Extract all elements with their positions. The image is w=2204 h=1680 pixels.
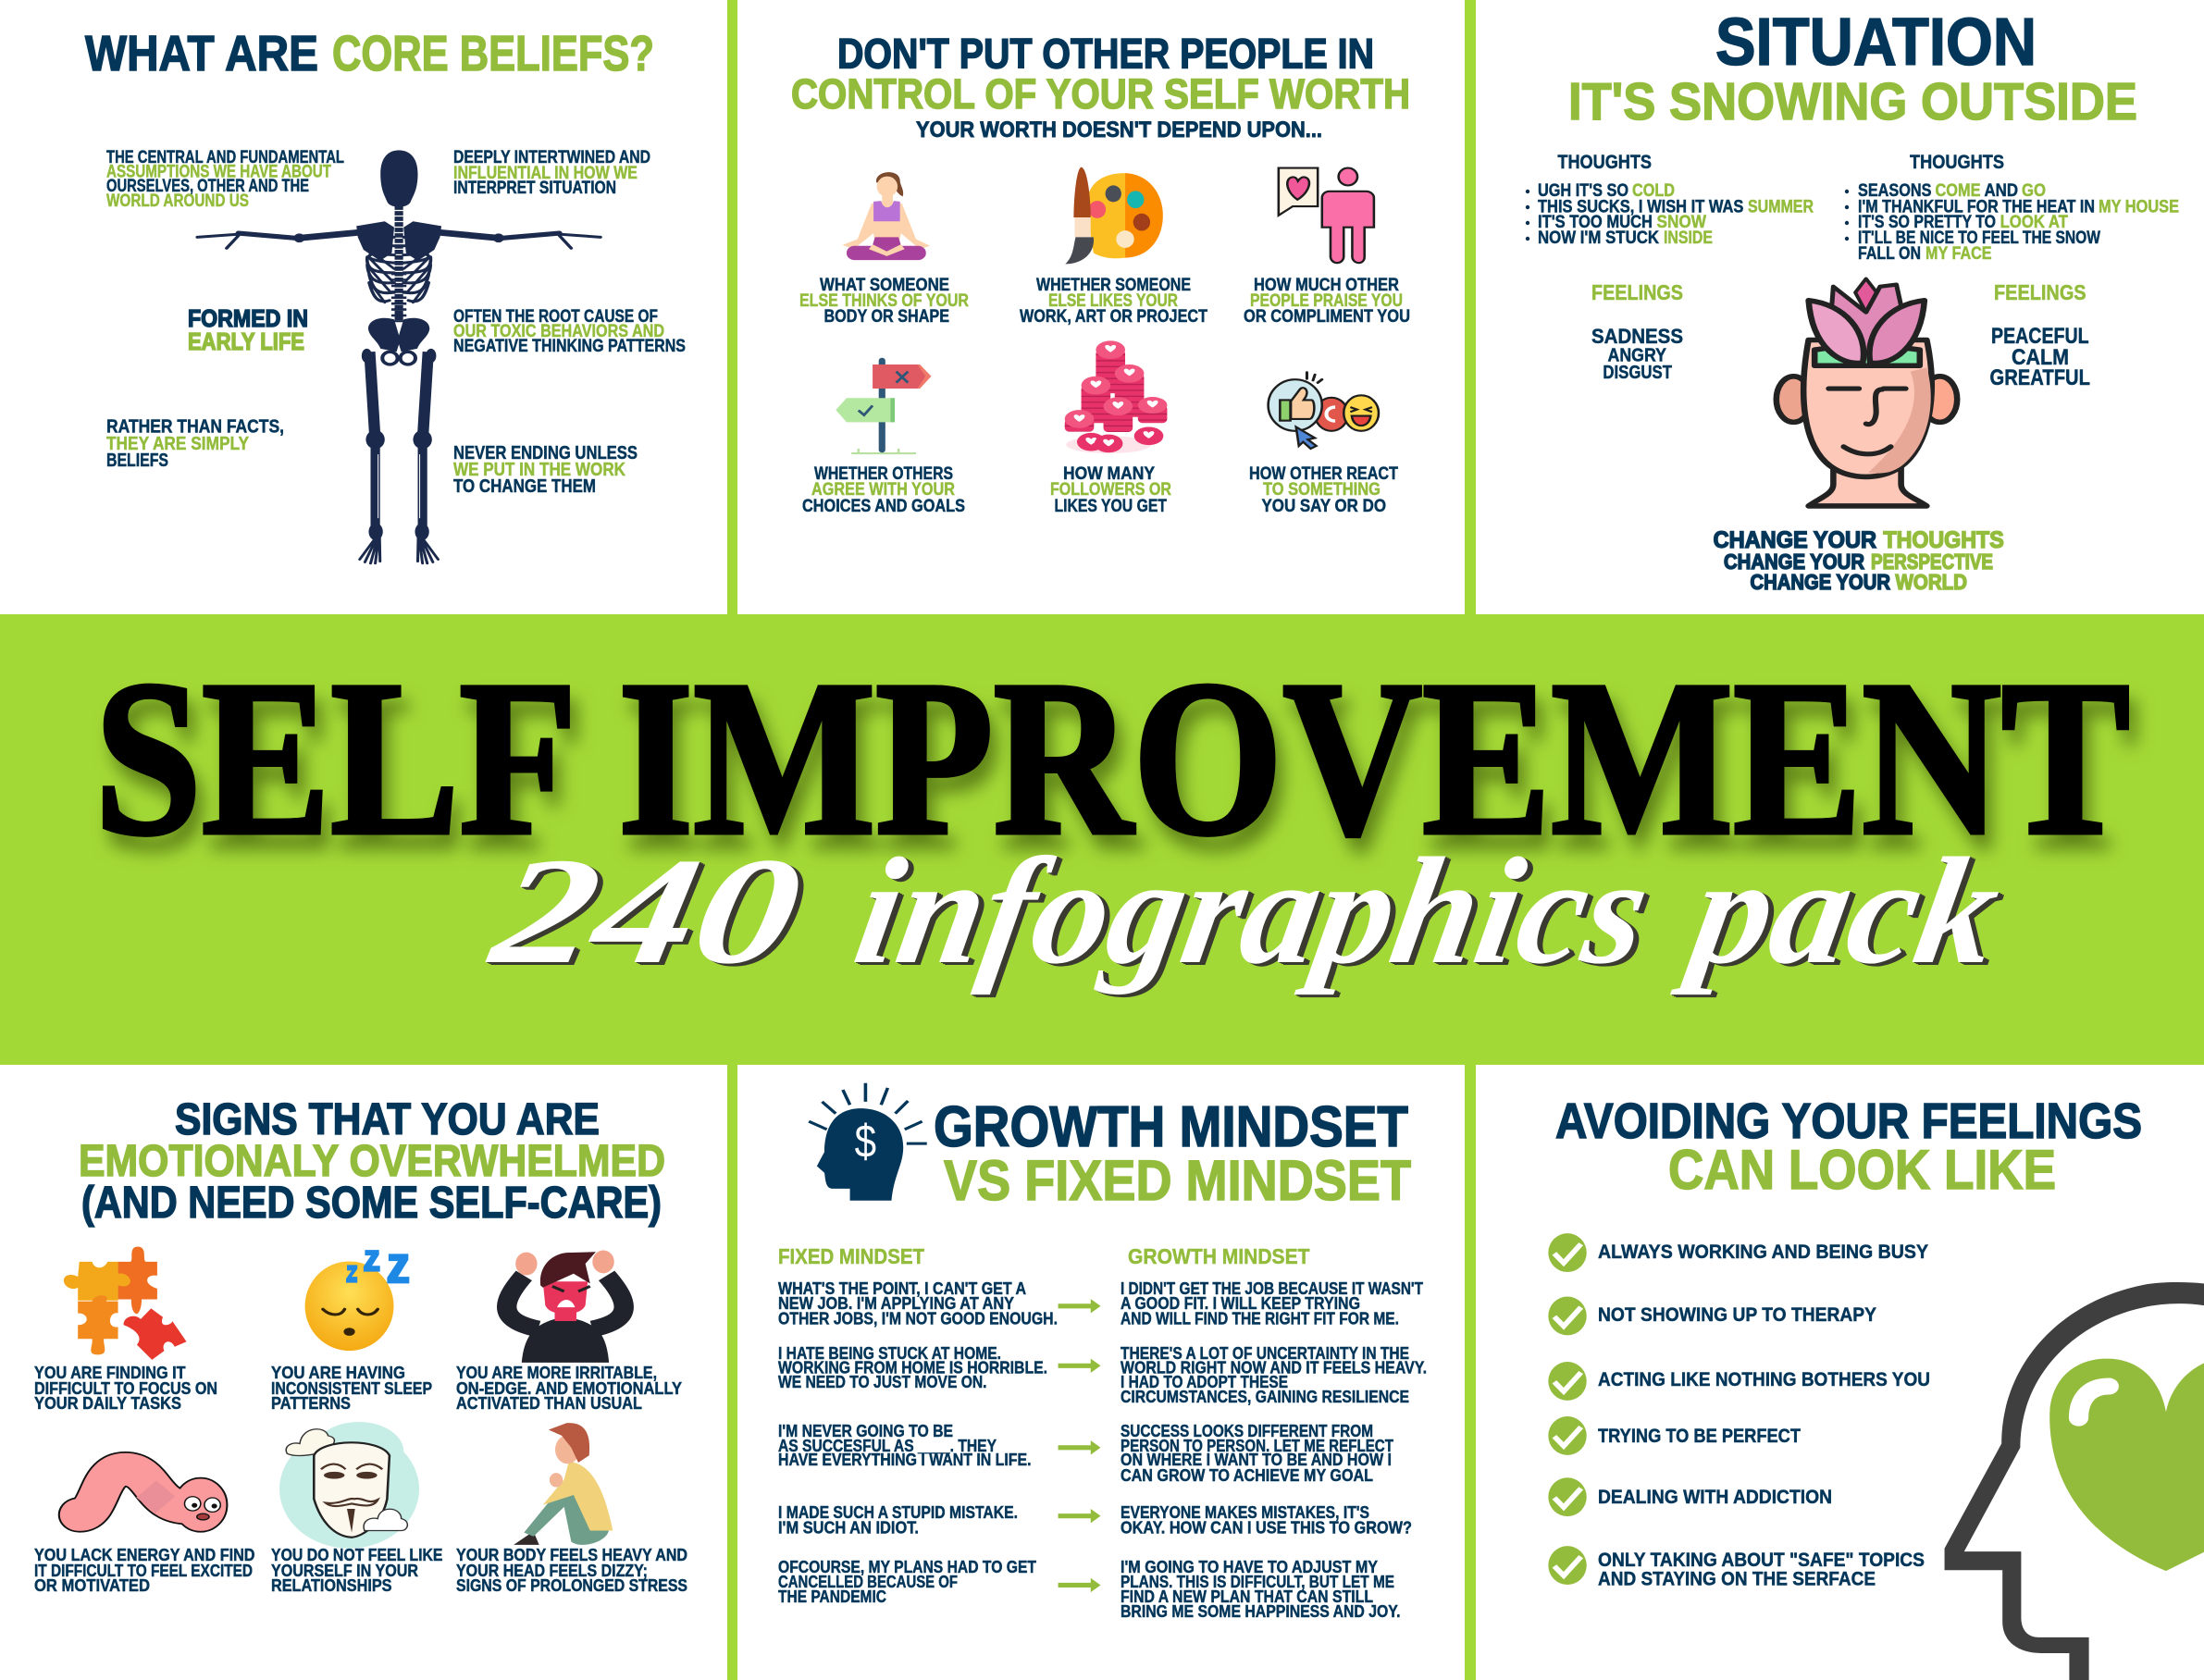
title band: [0, 614, 2204, 1065]
heading: GROWTH MINDSET: [934, 1095, 1408, 1159]
caption: irritable: ON-EDGE. AND EMOTIONALLY: [456, 1378, 683, 1398]
caption: praise: PEOPLE PRAISE YOU: [1250, 291, 1403, 311]
caption: praise: [1244, 276, 1410, 327]
thoughts: negative list: UGH IT'S SO: [1538, 181, 1628, 201]
row 4 growth: [1121, 1502, 1412, 1538]
row 3 growth: PERSON TO PERSON. LET ME REFLECT: [1121, 1436, 1394, 1455]
icon: puzzle pieces: [64, 1247, 187, 1360]
heading: (AND NEED SOME SELF-CARE): [81, 1179, 662, 1228]
row 5 fixed: CANCELLED BECAUSE OF: [778, 1572, 958, 1591]
heading: [934, 1095, 1411, 1212]
thoughts: negative list: INSIDE: [1664, 229, 1713, 248]
caption: choices: [802, 464, 965, 516]
caption: body or shape: [799, 276, 969, 327]
heading: [1555, 1093, 2142, 1201]
row 1 fixed: WHAT'S THE POINT, I CAN'T GET A: [778, 1279, 1026, 1298]
panel: self worth: [791, 30, 1410, 516]
panel: avoiding your feelings: [1548, 1093, 2204, 1680]
text: rather than facts: [106, 416, 284, 471]
row 4 growth: OKAY. HOW CAN I USE THIS TO GROW?: [1121, 1517, 1412, 1538]
caption: energy: IT DIFFICULT TO FEEL EXCITED: [34, 1561, 253, 1580]
caption: relationships: YOU DO NOT FEEL LIKE: [271, 1545, 442, 1564]
row 1 fixed: NEW JOB. I'M APPLYING AT ANY: [778, 1293, 1015, 1313]
thoughts: positive list: GO: [2022, 181, 2046, 201]
caption: body or shape: ELSE THINKS OF YOUR: [799, 291, 969, 311]
caption: react: [1249, 464, 1398, 516]
checklist text: ACTING LIKE NOTHING BOTHERS YOU: [1598, 1368, 1930, 1390]
text: never ending: NEVER ENDING UNLESS: [453, 443, 638, 463]
text: never ending: [453, 443, 638, 497]
thoughts: positive list: FALL ON: [1858, 244, 1921, 264]
feelings: left: SADNESS: [1591, 325, 1683, 348]
caption: relationships: RELATIONSHIPS: [271, 1575, 392, 1595]
closing statement: CHANGE YOUR: [1714, 527, 1876, 553]
row 1 growth: A GOOD FIT. I WILL KEEP TRYING: [1121, 1293, 1360, 1313]
row 5 growth: PLANS. THIS IS DIFFICULT, BUT LET ME: [1121, 1572, 1394, 1591]
feelings: right: FEELINGS: [1994, 280, 2086, 304]
caption: body or shape: WHAT SOMEONE: [820, 276, 949, 295]
icon: head with dollar sign: [809, 1083, 927, 1201]
thoughts: negative list: THOUGHTS: [1557, 152, 1652, 173]
text: deeply intertwined: INFLUENTIAL IN HOW WE: [453, 164, 638, 183]
row 3 growth: [1121, 1421, 1394, 1485]
caption: choices: CHOICES AND GOALS: [802, 497, 965, 516]
row 5 growth: [1121, 1557, 1401, 1621]
caption: work art project: WORK, ART OR PROJECT: [1020, 307, 1207, 327]
row 3 growth: CAN GROW TO ACHIEVE MY GOAL: [1121, 1465, 1373, 1485]
closing statement: [1714, 527, 2004, 594]
closing statement: THOUGHTS: [1883, 527, 2004, 553]
thoughts: positive list: IT'LL BE NICE TO FEEL THE SNOW: [1858, 229, 2100, 248]
heading: CAN LOOK LIKE: [1668, 1139, 2056, 1201]
thoughts: positive list: AND: [1984, 181, 2018, 201]
feelings: left: [1591, 280, 1683, 383]
heading: IT'S SNOWING OUTSIDE: [1568, 72, 2137, 131]
text: never ending: TO CHANGE THEM: [453, 476, 596, 497]
check icons: [1548, 1233, 1587, 1585]
row 2 fixed: I HATE BEING STUCK AT HOME.: [778, 1343, 1001, 1363]
caption: choices: AGREE WITH YOUR: [811, 480, 955, 500]
row 4 fixed: I MADE SUCH A STUPID MISTAKE.: [778, 1502, 1018, 1522]
thoughts: negative list: NOW I'M STUCK: [1538, 229, 1659, 248]
row 3 fixed: I'M NEVER GOING TO BE: [778, 1421, 953, 1440]
row 3 fixed: [778, 1421, 1031, 1469]
heading: SIGNS THAT YOU ARE: [175, 1095, 600, 1144]
row 2 growth: WORLD RIGHT NOW AND IT FEELS HEAVY.: [1121, 1358, 1427, 1377]
caption: react: YOU SAY OR DO: [1262, 497, 1386, 516]
row 1 growth: AND WILL FIND THE RIGHT FIT FOR ME.: [1121, 1308, 1399, 1328]
caption: sleep: INCONSISTENT SLEEP: [271, 1378, 432, 1398]
panel: situation: [1526, 6, 2179, 594]
text: root cause: NEGATIVE THINKING PATTERNS: [453, 337, 686, 356]
caption: react: HOW OTHER REACT: [1249, 464, 1398, 484]
row 1 fixed: [778, 1279, 1058, 1328]
checklist text: TRYING TO BE PERFECT: [1598, 1425, 1801, 1447]
icon: signpost: [836, 358, 931, 453]
heading: CONTROL OF YOUR SELF WORTH: [791, 70, 1410, 117]
caption: focus: YOUR DAILY TASKS: [34, 1393, 181, 1413]
column headings: GROWTH MINDSET: [1128, 1244, 1310, 1268]
heading: [1568, 6, 2137, 131]
heading: WHAT ARE: [85, 26, 318, 81]
checklist text: NOT SHOWING UP TO THERAPY: [1598, 1303, 1876, 1326]
row 2 growth: I HAD TO ADOPT THESE: [1121, 1372, 1288, 1391]
caption: work art project: [1020, 276, 1207, 327]
panel dividers: [727, 0, 1476, 1680]
row 2 growth: CIRCUMSTANCES, GAINING RESILIENCE: [1121, 1387, 1409, 1406]
row 2 growth: [1121, 1343, 1427, 1406]
text: never ending: WE PUT IN THE WORK: [453, 460, 625, 480]
thoughts: positive list: MY HOUSE: [2099, 198, 2179, 216]
text: root cause: [453, 307, 686, 356]
column headings: [778, 1244, 1310, 1268]
caption: irritable: [456, 1363, 683, 1413]
closing statement: CHANGE YOUR: [1751, 570, 1890, 594]
column headings: FIXED MINDSET: [778, 1244, 924, 1268]
subheading: YOUR WORTH DOESN'T DEPEND UPON...: [916, 117, 1322, 142]
panel: emotionally overwhelmed: [34, 1095, 687, 1595]
caption: work art project: ELSE LIKES YOUR: [1048, 291, 1178, 311]
feelings: left: ANGRY: [1608, 346, 1667, 366]
icon: sitting man: [514, 1423, 613, 1545]
thoughts: negative list: COLD: [1632, 181, 1675, 201]
thoughts: negative list: SNOW: [1656, 213, 1706, 232]
caption: energy: YOU LACK ENERGY AND FIND: [34, 1545, 255, 1564]
subtitle: pack: [1670, 826, 2012, 995]
icon: stacks of like coins: [1065, 340, 1167, 453]
row 1 growth: I DIDN'T GET THE JOB BECAUSE IT WASN'T: [1121, 1279, 1424, 1298]
caption: choices: WHETHER OTHERS: [814, 464, 953, 484]
text: formed in early life: FORMED IN: [188, 304, 308, 332]
heading: EMOTIONALY OVERWHELMED: [79, 1137, 665, 1186]
icon: skeleton: [197, 150, 601, 563]
icon: head with lotus: [1777, 278, 1957, 506]
caption: sleep: [271, 1363, 432, 1413]
thoughts: positive list: LOOK AT: [2000, 213, 2068, 232]
heading: [85, 26, 654, 81]
text: formed in early life: EARLY LIFE: [188, 327, 304, 355]
thoughts: positive list: SEASONS: [1858, 181, 1931, 201]
row 5 fixed: OFCOURSE, MY PLANS HAD TO GET: [778, 1557, 1037, 1576]
subtitle: [478, 826, 2012, 995]
heading: VS FIXED MINDSET: [944, 1149, 1411, 1212]
caption: relationships: [271, 1545, 442, 1595]
text: deeply intertwined: [453, 148, 650, 198]
text: central assumptions: [106, 148, 344, 211]
caption: stress: YOUR BODY FEELS HEAVY AND: [456, 1545, 687, 1564]
caption: irritable: ACTIVATED THAN USUAL: [456, 1393, 642, 1413]
row 1 fixed: OTHER JOBS, I'M NOT GOOD ENOUGH.: [778, 1308, 1058, 1328]
subtitle: infographics: [845, 826, 1661, 995]
text: deeply intertwined: INTERPRET SITUATION: [453, 179, 616, 198]
feelings: left: DISGUST: [1603, 363, 1672, 383]
caption: followers: HOW MANY: [1063, 464, 1155, 484]
row 4 fixed: I'M SUCH AN IDIOT.: [778, 1517, 919, 1538]
row 2 growth: THERE'S A LOT OF UNCERTAINTY IN THE: [1121, 1343, 1409, 1363]
thoughts: negative list: IT'S TOO MUCH: [1538, 213, 1653, 232]
caption: irritable: YOU ARE MORE IRRITABLE,: [456, 1363, 657, 1382]
feelings: right: CALM: [2012, 345, 2069, 370]
feelings: right: [1989, 280, 2090, 390]
caption: work art project: WHETHER SOMEONE: [1036, 276, 1191, 295]
row 2 fixed: WE NEED TO JUST MOVE ON.: [778, 1372, 986, 1391]
feelings: right: PEACEFUL: [1991, 324, 2089, 349]
row 3 growth: ON WHERE I WANT TO BE AND HOW I: [1121, 1450, 1392, 1469]
heading: DON'T PUT OTHER PEOPLE IN: [837, 30, 1374, 78]
checklist text: ONLY TAKING ABOUT "SAFE" TOPICS: [1598, 1549, 1925, 1571]
text: rather than facts: THEY ARE SIMPLY: [106, 434, 250, 454]
arrows: [1059, 1299, 1100, 1592]
text: deeply intertwined: DEEPLY INTERTWINED AND: [453, 148, 650, 167]
thoughts: positive list: COME: [1936, 181, 1980, 201]
feelings: left: FEELINGS: [1591, 280, 1683, 304]
icon: palette and brush: [1065, 167, 1163, 264]
row 5 fixed: THE PANDEMIC: [778, 1587, 886, 1606]
checklist text: DEALING WITH ADDICTION: [1598, 1486, 1832, 1508]
text: central assumptions: THE CENTRAL AND FUNDAMENTAL: [106, 148, 344, 167]
checklist text: [1598, 1241, 1930, 1589]
heading: [79, 1095, 665, 1228]
caption: energy: [34, 1545, 255, 1595]
icon: head with dollar sign: $: [855, 1115, 876, 1167]
row 5 growth: I'M GOING TO HAVE TO ADJUST MY: [1121, 1557, 1379, 1576]
feelings: right: GREATFUL: [1989, 365, 2090, 390]
text: central assumptions: OURSELVES, OTHER AND THE: [106, 177, 309, 196]
icon: reactions: [1269, 373, 1379, 449]
caption: stress: YOUR HEAD FEELS DIZZY;: [456, 1561, 648, 1580]
caption: stress: SIGNS OF PROLONGED STRESS: [456, 1575, 687, 1595]
icon: head outline with heart: [1945, 1282, 2204, 1680]
checklist text: ALWAYS WORKING AND BEING BUSY: [1598, 1241, 1928, 1263]
thoughts: negative list: SUMMER: [1748, 198, 1814, 216]
row 3 growth: SUCCESS LOOKS DIFFERENT FROM: [1121, 1421, 1373, 1440]
caption: praise: OR COMPLIMENT YOU: [1244, 307, 1410, 327]
thoughts: positive list: THOUGHTS: [1910, 152, 2004, 173]
caption: focus: DIFFICULT TO FOCUS ON: [34, 1378, 217, 1398]
heading: SITUATION: [1715, 6, 2037, 80]
row 2 fixed: [778, 1343, 1047, 1391]
caption: followers: LIKES YOU GET: [1055, 497, 1167, 516]
row 5 fixed: [778, 1557, 1037, 1606]
caption: followers: FOLLOWERS OR: [1050, 480, 1171, 500]
icon: tired worm: [80, 1469, 227, 1532]
thoughts: positive list: [1845, 152, 2179, 264]
thoughts: positive list: IT'S SO PRETTY TO: [1858, 213, 1996, 232]
caption: followers: [1050, 464, 1171, 516]
text: rather than facts: RATHER THAN FACTS,: [106, 416, 284, 437]
icon: angry man: [507, 1251, 624, 1363]
icon: person with speech bubble: [1279, 168, 1374, 263]
icon: sleeping face: [305, 1250, 409, 1351]
caption: stress: [456, 1545, 687, 1595]
row 4 growth: EVERYONE MAKES MISTAKES, IT'S: [1121, 1502, 1369, 1522]
text: rather than facts: BELIEFS: [106, 451, 168, 471]
caption: react: TO SOMETHING: [1263, 480, 1381, 500]
caption: praise: HOW MUCH OTHER: [1254, 276, 1399, 295]
row 5 growth: FIND A NEW PLAN THAT CAN STILL: [1121, 1587, 1373, 1606]
thoughts: negative list: [1526, 152, 1814, 248]
row 4 fixed: [778, 1502, 1018, 1538]
heading: [791, 30, 1410, 117]
closing statement: CHANGE YOUR: [1724, 550, 1864, 574]
icon: yoga woman: [842, 172, 930, 260]
subtitle: 240: [478, 826, 812, 995]
text: central assumptions: ASSUMPTIONS WE HAVE ABOUT: [106, 163, 331, 181]
panel: growth mindset: [778, 1083, 1427, 1621]
text: root cause: OFTEN THE ROOT CAUSE OF: [453, 307, 658, 327]
thoughts: positive list: I'M THANKFUL FOR THE HEAT IN: [1858, 198, 2095, 216]
caption: sleep: YOU ARE HAVING: [271, 1363, 405, 1382]
heading: AVOIDING YOUR FEELINGS: [1555, 1093, 2142, 1149]
checklist text: AND STAYING ON THE SERFACE: [1598, 1567, 1876, 1589]
caption: energy: OR MOTIVATED: [34, 1575, 150, 1595]
text: central assumptions: WORLD AROUND US: [106, 191, 249, 211]
row 3 fixed: HAVE EVERYTHING I WANT IN LIFE.: [778, 1450, 1031, 1469]
caption: focus: YOU ARE FINDING IT: [34, 1363, 186, 1382]
thoughts: negative list: THIS SUCKS, I WISH IT WAS: [1538, 198, 1743, 216]
caption: focus: [34, 1363, 217, 1413]
caption: body or shape: BODY OR SHAPE: [823, 307, 949, 327]
caption: relationships: YOURSELF IN YOUR: [271, 1561, 418, 1580]
text: formed in early life: [188, 304, 308, 355]
closing statement: WORLD: [1895, 570, 1967, 594]
panel: what are core beliefs: [85, 26, 686, 563]
row 1 growth: [1121, 1279, 1424, 1328]
row 3 fixed: AS SUCCESFUL AS ____. THEY: [778, 1436, 997, 1455]
icon: mask and clouds: [279, 1422, 419, 1549]
row 5 growth: BRING ME SOME HAPPINESS AND JOY.: [1121, 1601, 1401, 1621]
text: root cause: OUR TOXIC BEHAVIORS AND: [453, 322, 664, 341]
heading: CORE BELIEFS?: [332, 26, 654, 81]
closing statement: PERSPECTIVE: [1871, 550, 1993, 574]
row 2 fixed: WORKING FROM HOME IS HORRIBLE.: [778, 1358, 1047, 1377]
caption: sleep: PATTERNS: [271, 1393, 351, 1413]
thoughts: positive list: MY FACE: [1925, 244, 1992, 264]
